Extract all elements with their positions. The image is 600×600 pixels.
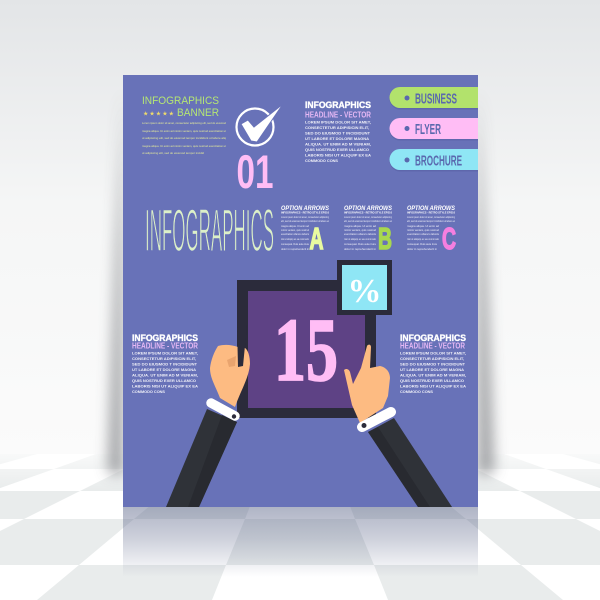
text block: headline vector left: HEADLINE - VECTOR <box>132 340 198 350</box>
floor reflection <box>123 507 478 577</box>
option column B: INFOGRAPHICS - RETRO STYLE EPS10 <box>344 210 392 214</box>
option column B: exercitation ullamco laboris <box>344 232 376 236</box>
text block: headline vector left: INFOGRAPHICS <box>132 333 198 343</box>
text block: headline vector left: ALIQUA. UT ENIM AD M VENIAM, <box>132 374 198 378</box>
option column B: elit, sed do eiusmod tempor incididunt ut labore et <box>344 219 392 223</box>
number 01: 01 <box>236 145 274 198</box>
text block: headline vector right: QUIS NOSTRUD EXER ULLAMCO <box>400 379 465 383</box>
text block: banner description <box>142 121 226 155</box>
pill: flyer <box>390 118 478 140</box>
text block: banner description: ut adipiscing elit, sed do eiusmod tempor incididunt ut labore aliq <box>142 136 226 140</box>
percent badge <box>337 260 392 315</box>
option column A: nisi ut aliquip ex ea commodo <box>281 237 309 241</box>
option column B: OPTION ARROWS <box>344 205 393 212</box>
text block: headline vector top: CONSECTETUR ADIPISICIN ELIT, <box>305 126 369 130</box>
text block: headline vector left <box>132 333 199 394</box>
text block: headline vector top: QUIS NOSTRUD EXER ULLAMCO <box>305 148 370 152</box>
text block: headline vector left: CONSECTETUR ADIPISICIN ELIT, <box>132 357 196 361</box>
poster <box>123 75 478 507</box>
text block: headline vector right: HEADLINE - VECTOR <box>400 340 465 350</box>
option column B: dolor in reprehenderit in <box>344 247 376 251</box>
option column A: INFOGRAPHICS - RETRO STYLE EPS10 <box>281 210 329 214</box>
text block: headline vector top: HEADLINE - VECTOR <box>305 110 371 120</box>
option column B: consequat. Duis aute irure <box>344 242 376 246</box>
option column C: nisi ut aliquip ex ea commodo <box>407 237 439 241</box>
option column A: elit, sed do eiusmod tempor incididunt ut labore et <box>281 219 329 223</box>
text block: headline vector left: LOREM IPSUM DOLOR SIT AMET, <box>132 352 198 356</box>
option column B: minim veniam, quis nostrud <box>344 228 376 232</box>
text block: headline vector left: SED DO EIUSMOD T INCIDIDUNT <box>132 362 197 366</box>
text block: headline vector right: ALIQUA. UT ENIM AD M VENIAM, <box>400 374 466 378</box>
left arm and hand <box>166 325 250 507</box>
option column B: magna aliqua. Ut enim ad <box>344 224 376 228</box>
letter C: C <box>442 221 456 256</box>
option column A: dolor in reprehenderit in <box>281 247 309 251</box>
option column A: minim veniam, quis nostrud <box>281 228 309 232</box>
pill: flyer: FLYER <box>415 121 441 138</box>
pill: brochure: BROCHURE <box>415 152 462 170</box>
icon: check mark in circle <box>236 104 283 146</box>
heading: infographics banner: INFOGRAPHICS <box>142 95 219 107</box>
option column C: magna aliqua. Ut enim ad <box>407 224 439 228</box>
option column A: magna aliqua. Ut enim ad <box>281 224 309 228</box>
text block: banner description: Lorem ipsum dolor sit amet, consectetur adipiscing elit, sed do eiusmod <box>142 121 226 125</box>
heading: infographics banner: BANNER <box>177 107 219 119</box>
option column C: minim veniam, quis nostrud <box>407 228 439 232</box>
option column C: Lorem ipsum dolor sit amet, consectetur adipiscing <box>407 215 455 219</box>
text: INFOGRAPHICS <box>145 197 274 264</box>
number 15: 15 <box>274 301 338 400</box>
text block: headline vector right: LOREM IPSUM DOLOR SIT AMET, <box>400 352 466 356</box>
text block: headline vector top: ALIQUA. UT ENIM AD M VENIAM, <box>305 142 371 146</box>
option column A: Lorem ipsum dolor sit amet, consectetur adipiscing <box>281 215 329 219</box>
text block: headline vector right <box>400 333 467 394</box>
text block: headline vector top: LABORIS NISI UT ALIQUIP EX EA <box>305 154 372 158</box>
option column A: exercitation ullamco laboris <box>281 232 309 236</box>
text block: headline vector left: LABORIS NISI UT ALIQUIP EX EA <box>132 384 199 388</box>
option column B: nisi ut aliquip ex ea commodo <box>344 237 376 241</box>
text block: headline vector right: COMMODO CONS <box>400 390 433 394</box>
wall background <box>0 0 600 454</box>
text block: headline vector left: UT LABORE ET DOLORE MAGNA <box>132 368 197 372</box>
text block: headline vector top <box>305 100 372 163</box>
heading: infographics banner: ★★★★★ <box>143 110 174 118</box>
option column C: exercitation ullamco laboris <box>407 232 439 236</box>
checkered floor <box>0 454 600 600</box>
heading: infographics banner <box>142 95 219 119</box>
pill: brochure <box>390 149 478 172</box>
tablet <box>237 280 376 418</box>
text block: headline vector left: QUIS NOSTRUD EXER ULLAMCO <box>132 379 197 383</box>
option column C: OPTION ARROWS <box>407 205 456 212</box>
text block: headline vector right: CONSECTETUR ADIPISICIN ELIT, <box>400 357 464 361</box>
letter A: A <box>310 221 324 256</box>
poster shadow <box>108 90 494 476</box>
text block: banner description: magna aliqua. Ut enim ad minim veniam, quis nostrud exercitation ut <box>142 144 226 148</box>
text block: headline vector right: UT LABORE ET DOLORE MAGNA <box>400 368 465 372</box>
option column A: consequat. Duis aute irure <box>281 242 309 246</box>
text block: headline vector top: LOREM IPSUM DOLOR SIT AMET, <box>305 120 371 124</box>
option column C: consequat. Duis aute irure <box>407 242 437 246</box>
text block: headline vector top: UT LABORE ET DOLORE MAGNA <box>305 137 370 141</box>
option column C: INFOGRAPHICS - RETRO STYLE EPS10 <box>407 210 455 214</box>
text block: headline vector right: INFOGRAPHICS <box>400 333 466 343</box>
letter B: B <box>378 221 392 256</box>
text block: headline vector left: COMMODO CONS <box>132 390 165 394</box>
text block: headline vector right: LABORIS NISI UT ALIQUIP EX EA <box>400 384 467 388</box>
text block: headline vector top: INFOGRAPHICS <box>305 100 371 110</box>
text block: banner description: ut adipiscing elit, sed do eiusmod tempor incidid <box>142 151 204 155</box>
right arm and hand <box>344 345 452 507</box>
option column B: Lorem ipsum dolor sit amet, consectetur adipiscing <box>344 215 392 219</box>
option column C <box>407 205 456 256</box>
option column A <box>281 205 330 256</box>
option column C: dolor in reprehenderit in <box>407 247 437 251</box>
text block: headline vector top: SED DO EIUSMOD T INCIDIDUNT <box>305 132 370 136</box>
pill: business <box>390 87 478 110</box>
text block: headline vector top: COMMODO CONS <box>305 159 338 163</box>
pill: business: BUSINESS <box>415 90 457 108</box>
option column B <box>344 205 393 256</box>
option column C: elit, sed do eiusmod tempor incididunt ut labore et <box>407 219 455 223</box>
text block: headline vector right: SED DO EIUSMOD T INCIDIDUNT <box>400 362 465 366</box>
option column A: OPTION ARROWS <box>281 205 330 212</box>
text block: banner description: magna aliqua. Ut enim ad minim veniam, quis nostrud exercitation ut <box>142 129 226 133</box>
percent badge: % <box>348 273 382 310</box>
